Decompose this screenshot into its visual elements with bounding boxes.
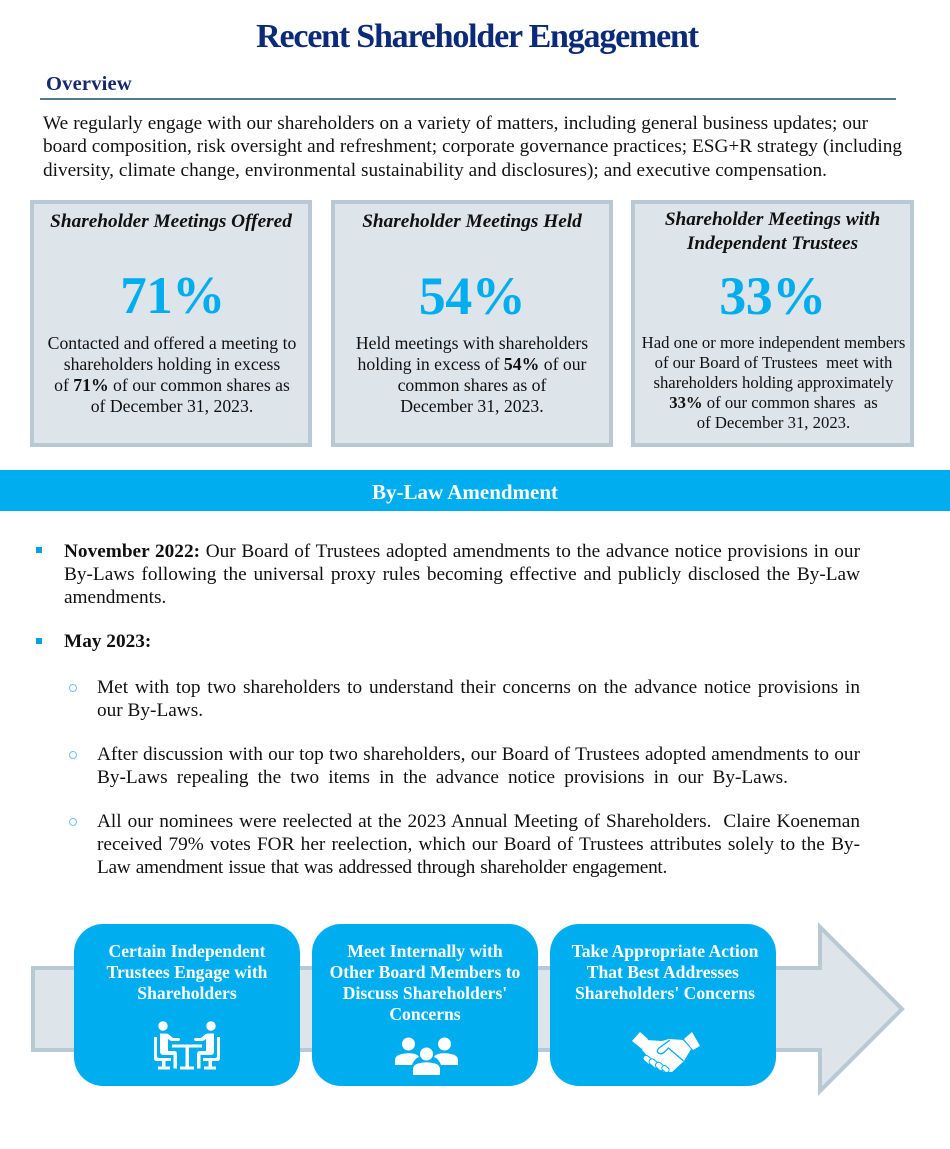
stat: 33%: 33% (719, 266, 826, 326)
overview paragraph: board composition, risk oversight and refreshment; corporate governance practices; ESG+R strategy (including (43, 136, 902, 157)
title: Recent Shareholder Engagement (256, 18, 698, 55)
sub-bullet marker (69, 818, 77, 826)
bullet: november 2022: November 2022: Our Board of Trustees adopted amendments to the advance notice provisions in our (64, 541, 860, 562)
box text: Shareholders' Concerns (575, 983, 755, 1003)
panel heading: Shareholder Meetings Offered (50, 211, 292, 232)
panel text: of December 31, 2023. (697, 413, 850, 432)
box text: Concerns (389, 1004, 461, 1024)
panel text: Held meetings with shareholders (356, 332, 588, 352)
sub-bullet: nominees reelected: All our nominees were reelected at the 2023 Annual Meeting of Shareholders. Claire Koeneman (97, 811, 860, 832)
box text: Other Board Members to (330, 962, 520, 982)
overview paragraph: diversity, climate change, environmental sustainability and disclosures); and executive compensation. (43, 160, 827, 180)
panel text: December 31, 2023. (400, 396, 544, 416)
panel text: holding in excess of 54% of our (358, 354, 586, 374)
box text (572, 941, 758, 1003)
banner: by-law amendment (0, 470, 950, 511)
banner: by-law amendment: By-Law Amendment (372, 480, 558, 504)
panel text: 33% of our common shares as (669, 393, 878, 412)
sub-bullet: after discussion (97, 744, 860, 788)
panel text: common shares as of (398, 374, 546, 394)
sub-bullet: after discussion: After discussion with our top two shareholders, our Board of Trustees adopted amendments to our (97, 744, 860, 765)
sub-bullet: met with top two shareholders: Met with top two shareholders to understand their concerns on the advance notice provisions in (97, 676, 860, 698)
heading: overview: Overview (46, 73, 132, 95)
bullet: november 2022: amendments. (64, 587, 166, 608)
panel heading: Shareholder Meetings with (665, 209, 880, 230)
panel text (48, 332, 296, 416)
icon: group of people (395, 1038, 458, 1075)
overview paragraph: We regularly engage with our shareholders on a variety of matters, including general business updates; our (43, 112, 868, 134)
box text: Trustees Engage with (107, 962, 267, 982)
panel text (642, 332, 905, 432)
panel text: of December 31, 2023. (91, 396, 253, 416)
box text: Certain Independent (109, 941, 265, 961)
box text: That Best Addresses (587, 962, 739, 982)
panel heading: Shareholder Meetings Held (362, 211, 582, 232)
panel text (356, 332, 588, 416)
box text (106, 941, 268, 1003)
panel heading: Independent Trustees (687, 233, 858, 254)
stat: 71%: 71% (120, 267, 225, 325)
panel text: Had one or more independent members (642, 332, 905, 352)
panel heading (665, 209, 880, 254)
overview rule (40, 98, 896, 100)
sub-bullet: met with top two shareholders (97, 676, 860, 721)
sub-bullet: after discussion: By-Laws repealing the two items in the advance notice provisions in our By-Laws. (97, 767, 788, 788)
bullet marker (36, 547, 42, 553)
overview paragraph (43, 112, 902, 180)
process box: engage with shareholders (74, 924, 300, 1086)
sub-bullet: nominees reelected (97, 811, 860, 878)
bullet marker (36, 638, 42, 644)
panel text: of 71% of our common shares as (54, 374, 290, 394)
box text: Meet Internally with (347, 941, 503, 961)
sub-bullet: met with top two shareholders: our By-Laws. (97, 700, 203, 721)
box text: Discuss Shareholders' (343, 983, 507, 1003)
box text: Take Appropriate Action (572, 941, 758, 961)
sub-bullet: nominees reelected: Law amendment issue that was addressed through shareholder engagement. (97, 857, 667, 878)
panel text: shareholders holding approximately (653, 373, 894, 392)
icon: handshake (632, 1032, 700, 1072)
panel: meetings offered (30, 200, 312, 447)
sub-bullet marker (69, 684, 77, 692)
process box: meet internally (312, 924, 538, 1086)
bullet: may 2023: May 2023: (64, 631, 151, 652)
panel text: of our Board of Trustees meet with (655, 353, 892, 372)
panel text: shareholders holding in excess (64, 354, 280, 374)
process box: take action (550, 924, 776, 1086)
sub-bullet: nominees reelected: received 79% votes FOR her reelection, which our Board of Trustees attributes solely to the By- (97, 834, 860, 855)
sub-bullet marker (69, 751, 77, 759)
stat: 54%: 54% (419, 266, 525, 326)
bullet: november 2022 (64, 541, 860, 608)
panel: meetings held (331, 200, 613, 447)
bullet: november 2022: By-Laws following the universal proxy rules becoming effective and publicly disclosed the By-Law (64, 564, 860, 585)
box text (330, 941, 520, 1024)
process arrow (31, 922, 905, 1096)
icon: people meeting at table (154, 1021, 220, 1070)
box text: Shareholders (137, 983, 237, 1003)
panel: meetings with independent trustees (631, 200, 914, 447)
panel text: Contacted and offered a meeting to (48, 332, 296, 352)
